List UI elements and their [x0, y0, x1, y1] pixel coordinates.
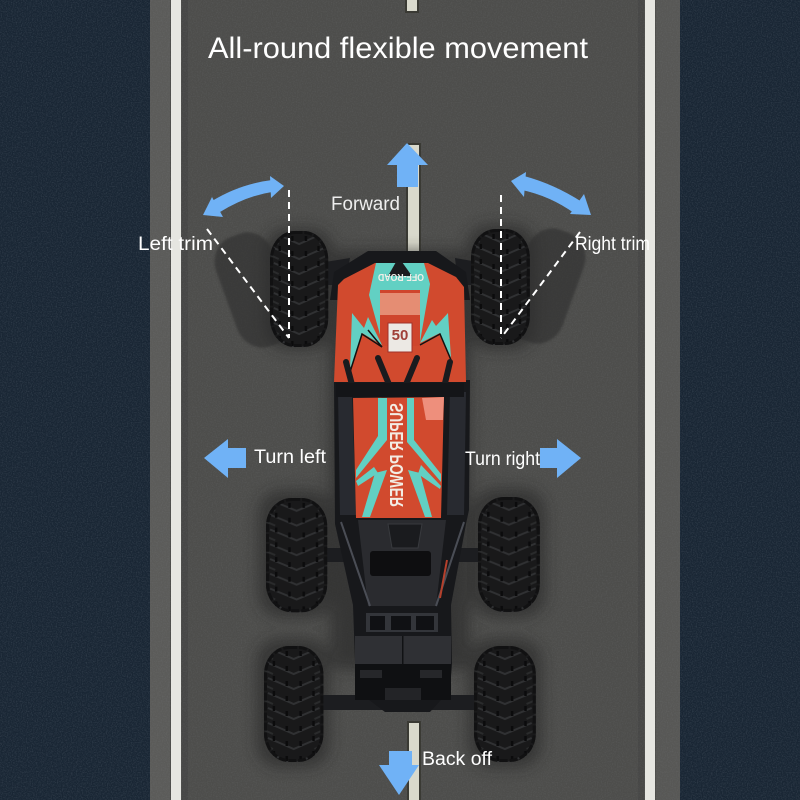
- arrow: turn right: [540, 439, 581, 478]
- arrow: turn left: [204, 439, 246, 478]
- arrow: back off: [379, 751, 419, 795]
- axles: [318, 258, 490, 710]
- front left tire: [270, 231, 328, 347]
- roll bars: [346, 358, 450, 396]
- road edge lines: [171, 0, 655, 800]
- chassis: [334, 380, 470, 712]
- hood brand text: OFF-ROAD: [378, 271, 424, 282]
- label: left trim: Left trim: [138, 234, 213, 255]
- rear right tire: [474, 646, 536, 762]
- ghost right front tire, steered: [497, 221, 593, 351]
- roof brand text: SUPER POWER: [387, 403, 407, 507]
- number badge: 50: [392, 327, 408, 344]
- label: right trim: Right trim: [575, 234, 650, 255]
- off-road vehicle: [207, 221, 593, 762]
- arrow: right trim double arrow: [511, 172, 591, 215]
- middle right tire: [478, 497, 540, 612]
- front hood: [330, 251, 470, 382]
- road surface: [150, 0, 680, 800]
- front right tire: [471, 229, 530, 345]
- middle left tire: [266, 498, 327, 612]
- label: forward: Forward: [331, 194, 400, 215]
- arrow: left trim double arrow: [203, 176, 284, 217]
- trim guide: left dashed lines: [207, 190, 289, 338]
- arrow: forward: [387, 143, 428, 187]
- side teal spikes: [350, 313, 382, 370]
- road centre dashes: [406, 0, 420, 800]
- central teal stripes: [369, 263, 430, 342]
- roof panel: [336, 383, 464, 518]
- label: turn right: Turn right: [465, 449, 541, 470]
- title: All-round flexible movement: [208, 32, 589, 65]
- vehicle shadow: [256, 224, 546, 768]
- label: turn left: Turn left: [254, 447, 327, 468]
- trim guide: right dashed lines: [501, 195, 580, 338]
- ghost left front tire, steered: [207, 225, 303, 355]
- label: back off: Back off: [422, 749, 493, 770]
- rear left tire: [264, 646, 323, 762]
